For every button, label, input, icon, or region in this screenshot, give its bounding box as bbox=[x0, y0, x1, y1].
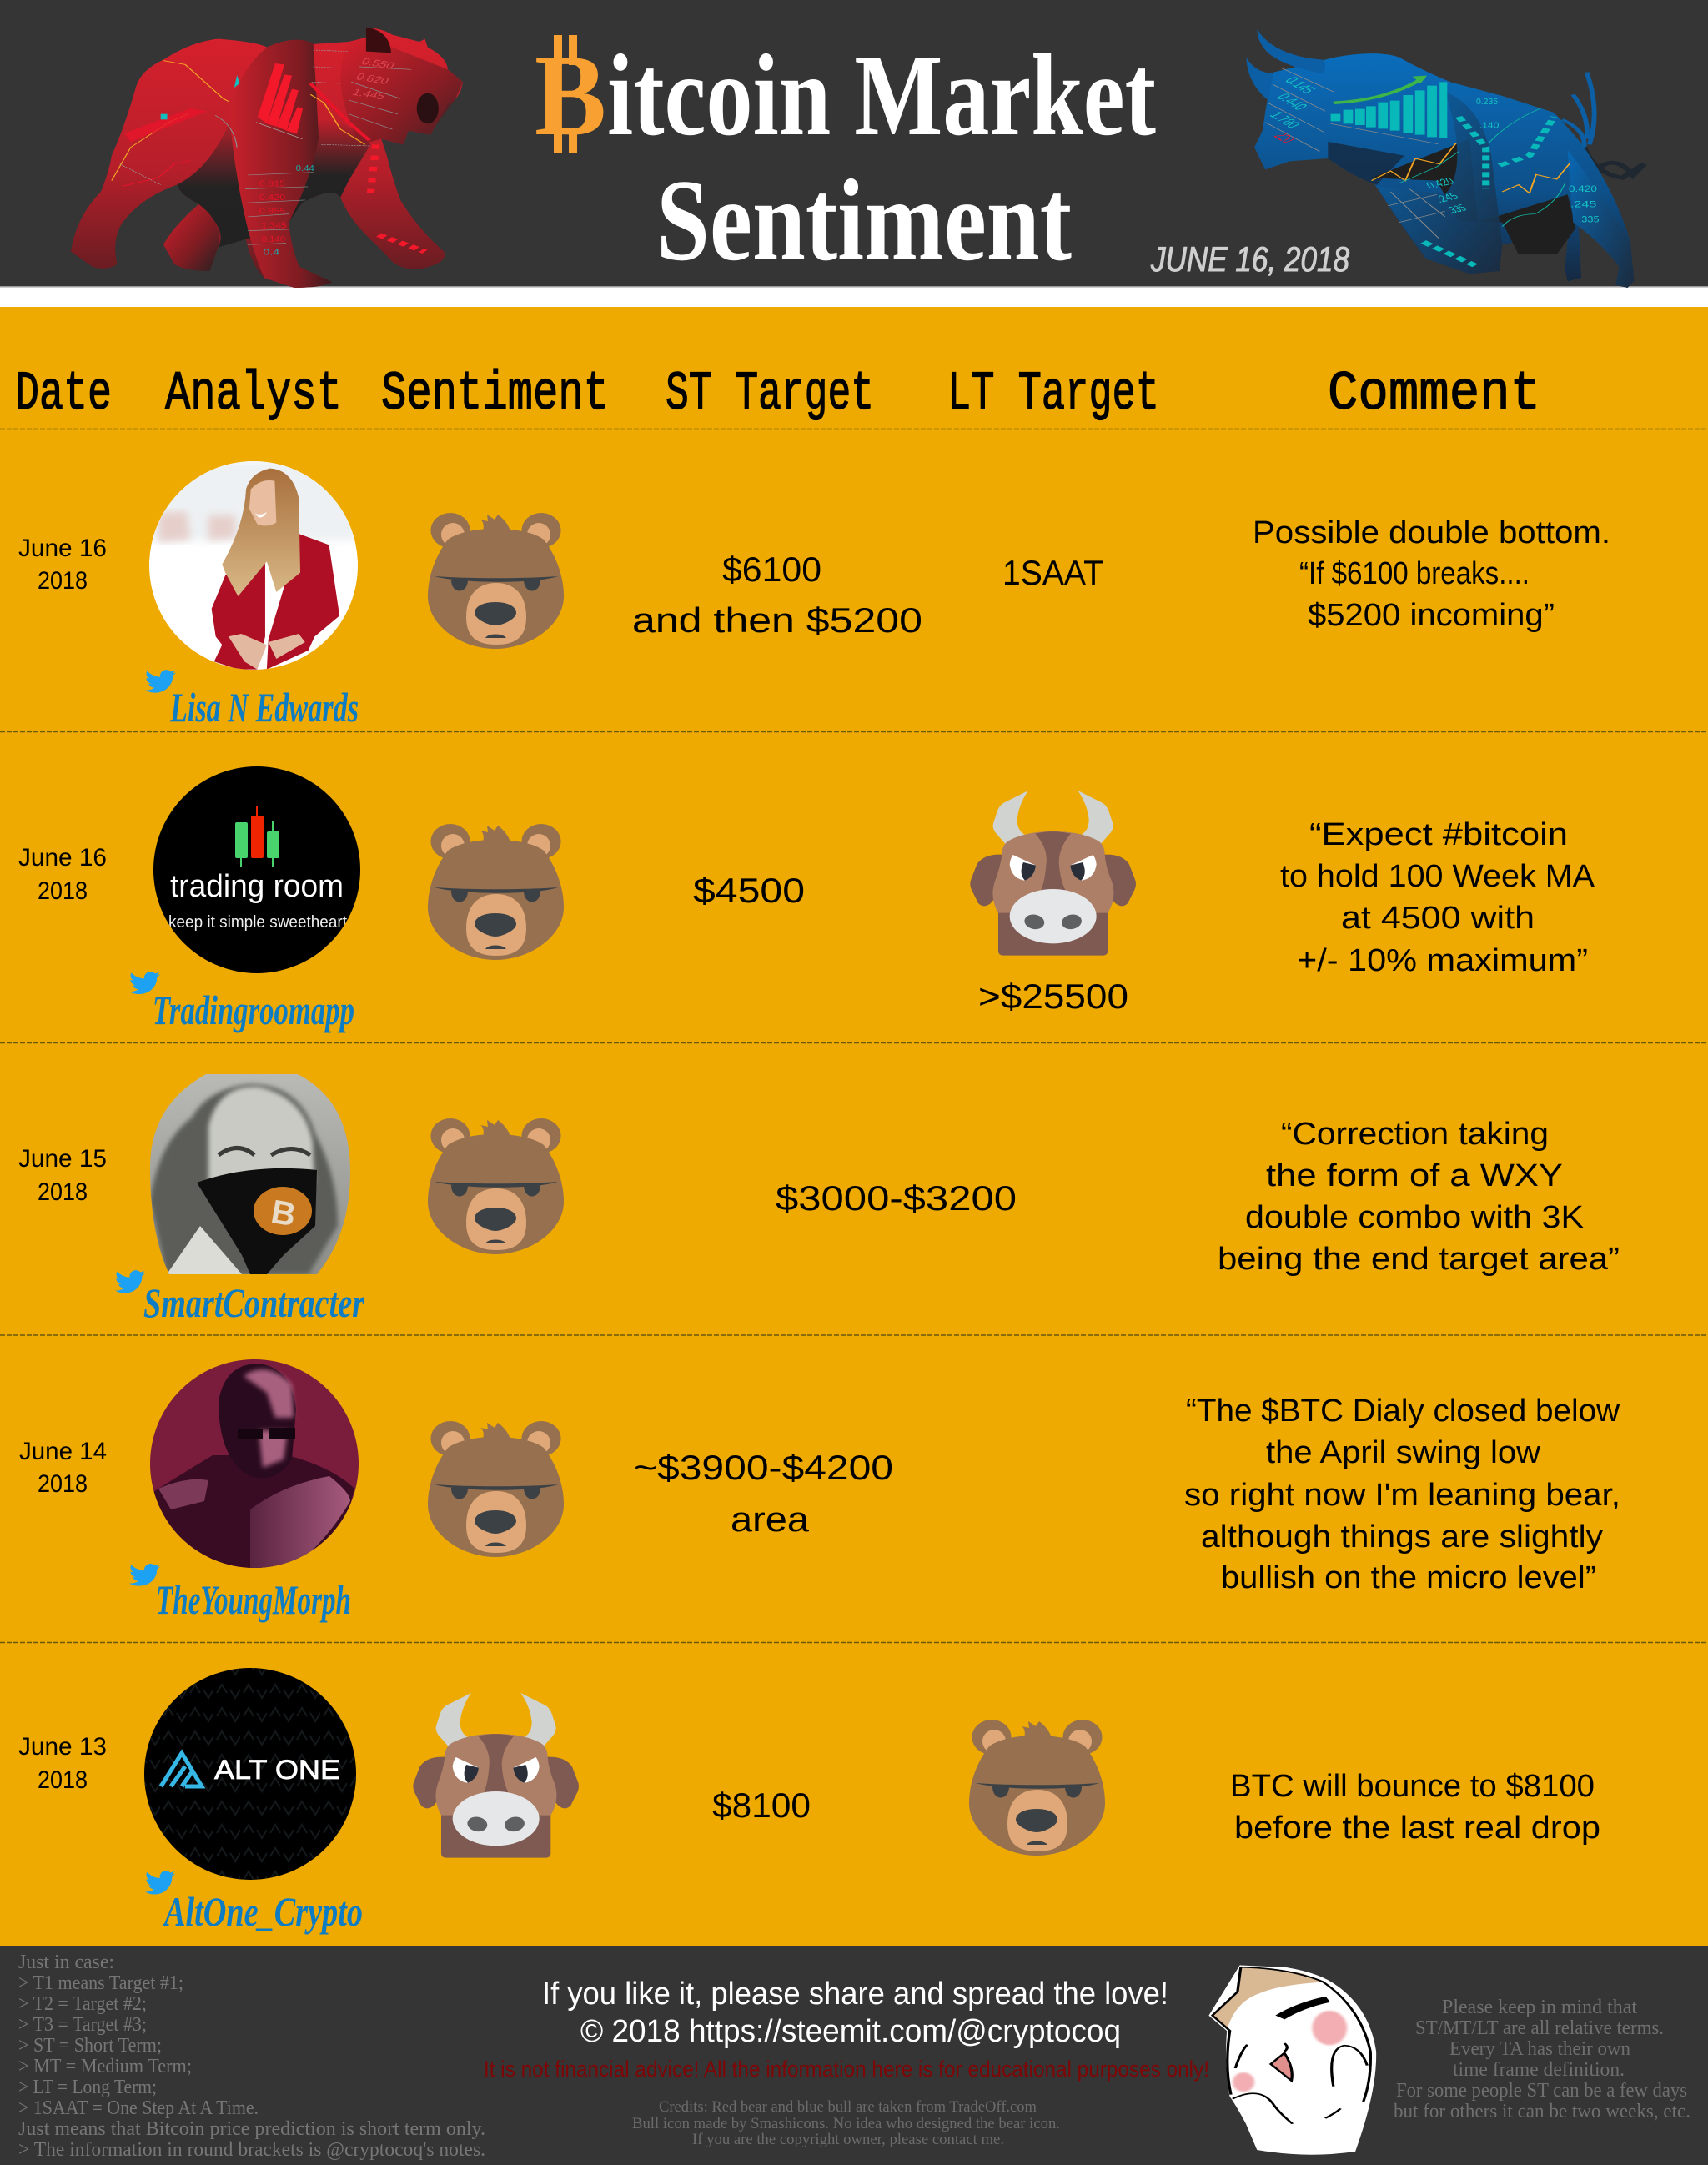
short term target: area bbox=[731, 1499, 810, 1539]
date: 2018 bbox=[38, 1178, 88, 1206]
footer band bbox=[0, 1946, 1708, 2165]
glossary notes: > 1SAAT = One Step At A Time. bbox=[18, 2097, 259, 2119]
date bbox=[18, 1145, 107, 1206]
blue bull illustration: 0.440 bbox=[1273, 92, 1312, 112]
icon: bear long term bbox=[969, 1720, 1105, 1856]
target: $3000-$3200 bbox=[776, 1178, 1017, 1218]
blue bull illustration: 0.420 bbox=[1569, 183, 1597, 194]
icon: bear sentiment bbox=[428, 824, 564, 960]
icon: bull sentiment bbox=[413, 1693, 579, 1858]
right-hand note: ST/MT/LT are all relative terms. bbox=[1415, 2017, 1664, 2039]
comment: at 4500 with bbox=[1341, 901, 1535, 936]
date: June 16 bbox=[18, 535, 107, 562]
icon: bitcoin B: B bbox=[535, 31, 606, 160]
date: 2018 bbox=[38, 877, 88, 905]
short term target: and then $5200 bbox=[632, 600, 922, 640]
icon: bear sentiment bbox=[428, 513, 564, 649]
red bear illustration: 1.445 bbox=[350, 87, 388, 102]
icon: twitter bird bbox=[129, 972, 160, 994]
glossary notes: Just in case: bbox=[18, 1952, 114, 1973]
short term target: ~$3900-$4200 bbox=[634, 1448, 893, 1487]
right-hand note bbox=[1394, 1997, 1690, 2122]
red bear illustration: 0.855 bbox=[259, 207, 285, 216]
row 1: Lisa N Edwards bbox=[18, 461, 1610, 731]
row 4: TheYoungMorph bbox=[19, 1359, 1620, 1623]
comment bbox=[1253, 515, 1610, 633]
date stamp: JUNE 16, 2018 bbox=[1150, 239, 1350, 279]
share message: If you like it, please share and spread the love! bbox=[542, 1977, 1168, 2012]
comment: BTC will bounce to $8100 bbox=[1230, 1769, 1595, 1804]
icon: twitter bird bbox=[145, 1871, 175, 1895]
red bear illustration: 0.140 bbox=[262, 235, 286, 244]
red bear illustration: 0.44 bbox=[296, 164, 314, 173]
handle: SmartContracter bbox=[143, 1279, 364, 1326]
icon: bear sentiment bbox=[428, 1421, 564, 1557]
comment bbox=[1184, 1394, 1620, 1595]
comment: to hold 100 Week MA bbox=[1280, 859, 1595, 894]
disclaimer: It is not financial advice! All the information here is for educational purposes only! bbox=[484, 2057, 1209, 2082]
blue bull illustration: .140 bbox=[1479, 121, 1500, 130]
blue bull illustration: .245 bbox=[1433, 190, 1461, 205]
icon: twitter bird bbox=[145, 670, 176, 693]
red bear illustration: 0.4 bbox=[263, 248, 279, 257]
credits: Bull icon made by Smashicons. No idea who designed the bear icon. bbox=[632, 2115, 1060, 2132]
row 5: AltOne_Crypto bbox=[18, 1668, 1600, 1935]
column headings: Comment bbox=[1328, 363, 1540, 425]
glossary notes: Just means that Bitcoin price prediction is short term only. bbox=[18, 2118, 485, 2140]
short term target: $4500 bbox=[693, 871, 805, 910]
short term target bbox=[634, 1448, 893, 1539]
amber table panel bbox=[0, 307, 1708, 1946]
date: 2018 bbox=[38, 1766, 88, 1794]
comment: the form of a WXY bbox=[1266, 1158, 1563, 1193]
comment: bullish on the micro level” bbox=[1221, 1560, 1596, 1595]
glossary notes: > The information in round brackets is @cryptocoq's notes. bbox=[18, 2139, 485, 2161]
column headings: Sentiment bbox=[381, 363, 609, 425]
glossary notes: > MT = Medium Term; bbox=[18, 2056, 192, 2077]
column headings: Date bbox=[15, 363, 112, 425]
right-hand note: For some people ST can be a few days bbox=[1396, 2080, 1687, 2102]
date: June 16 bbox=[18, 844, 107, 872]
icon: twitter bird bbox=[115, 1270, 145, 1293]
date: June 13 bbox=[18, 1733, 107, 1761]
comment: $5200 incoming” bbox=[1308, 598, 1555, 633]
avatar: trading room: keep it simple sweetheart bbox=[168, 913, 347, 932]
date: 2018 bbox=[38, 1470, 88, 1498]
avatar: Alt One logo: ALT ONE bbox=[214, 1755, 340, 1785]
red bear illustration: 0.815 bbox=[259, 179, 285, 188]
title: itcoin Market bbox=[607, 31, 1156, 160]
comment: Possible double bottom. bbox=[1253, 515, 1610, 550]
date bbox=[18, 844, 107, 905]
glossary notes bbox=[18, 1952, 485, 2161]
red bear illustration: 1.345 bbox=[262, 221, 287, 230]
long term target: 1SAAT bbox=[1002, 553, 1103, 592]
avatar: masked Franklin: B bbox=[269, 1193, 299, 1233]
right-hand note: Every TA has their own bbox=[1449, 2038, 1630, 2060]
share message: © 2018 https://steemit.com/@cryptocoq bbox=[580, 2014, 1121, 2049]
long term target with bull bbox=[970, 791, 1136, 1016]
blue bull illustration bbox=[1246, 29, 1644, 288]
credits: Credits: Red bear and blue bull are taken from TradeOff.com bbox=[659, 2098, 1037, 2116]
blue bull illustration: .335 bbox=[1579, 213, 1600, 224]
credits bbox=[632, 2098, 1060, 2148]
column headings: LT Target bbox=[947, 363, 1159, 425]
comment: before the last real drop bbox=[1234, 1811, 1600, 1846]
blue bull illustration: 1.780 bbox=[1266, 109, 1304, 130]
avatar: Lisa bbox=[149, 461, 358, 670]
glossary notes: > T3 = Target #3; bbox=[18, 2014, 147, 2036]
red bear illustration: 0.820 bbox=[354, 71, 392, 87]
long term target with bull: >$25500 bbox=[978, 977, 1128, 1016]
glossary notes: > T2 = Target #2; bbox=[18, 1993, 147, 2015]
avatar: masked Franklin bbox=[150, 1074, 350, 1274]
comment: “Correction taking bbox=[1281, 1117, 1549, 1152]
glossary notes: > T1 means Target #1; bbox=[18, 1972, 183, 1994]
handle: AltOne_Crypto bbox=[163, 1888, 363, 1935]
comment bbox=[1230, 1769, 1600, 1846]
comment: +/- 10% maximum” bbox=[1297, 943, 1588, 978]
short term target: $6100 bbox=[722, 550, 821, 589]
glossary notes: > ST = Short Term; bbox=[18, 2035, 162, 2057]
right-hand note: but for others it can be two weeks, etc. bbox=[1394, 2101, 1690, 2122]
icon: twitter bird bbox=[129, 1564, 160, 1586]
comment bbox=[1218, 1117, 1620, 1277]
blue bull illustration: 0.145 bbox=[1281, 75, 1319, 95]
title: Sentiment bbox=[656, 156, 1072, 285]
comment: double combo with 3K bbox=[1245, 1200, 1584, 1235]
handle: Lisa N Edwards bbox=[169, 684, 359, 731]
icon: bear sentiment bbox=[428, 1118, 564, 1254]
comment: the April swing low bbox=[1266, 1435, 1541, 1470]
short term target bbox=[632, 550, 922, 640]
blue bull illustration: .245 bbox=[1570, 198, 1596, 209]
comment: so right now I'm leaning bear, bbox=[1184, 1478, 1620, 1513]
date bbox=[18, 1733, 107, 1794]
blue bull illustration: 0.420 bbox=[1424, 175, 1457, 191]
short term target: $8100 bbox=[712, 1786, 811, 1825]
column headings bbox=[15, 363, 1540, 425]
row 2: Tradingroomapp bbox=[18, 766, 1595, 1033]
comment: although things are slightly bbox=[1201, 1520, 1603, 1555]
date bbox=[19, 1438, 107, 1498]
mascot character bbox=[1210, 1966, 1375, 2154]
right-hand note: Please keep in mind that bbox=[1442, 1997, 1637, 2018]
avatar: trading room bbox=[153, 766, 360, 973]
column headings: ST Target bbox=[666, 363, 874, 425]
comment: being the end target area” bbox=[1218, 1242, 1620, 1277]
handle: Tradingroomapp bbox=[153, 987, 354, 1033]
comment bbox=[1280, 817, 1595, 978]
date: 2018 bbox=[38, 567, 88, 595]
blue bull illustration: 0.235 bbox=[1476, 98, 1498, 107]
date bbox=[18, 535, 107, 595]
right-hand note: time frame definition. bbox=[1453, 2059, 1625, 2081]
header band bbox=[0, 0, 1708, 307]
column headings: Analyst bbox=[165, 363, 342, 425]
share message bbox=[542, 1977, 1168, 2049]
red bear illustration bbox=[71, 28, 463, 288]
blue bull illustration: .335 bbox=[1444, 203, 1469, 216]
avatar: trading room: trading room bbox=[170, 869, 344, 904]
title bbox=[535, 31, 1156, 285]
comment: “Expect #bitcoin bbox=[1309, 817, 1568, 852]
avatar: Alt One logo bbox=[143, 1668, 357, 1880]
handle: TheYoungMorph bbox=[156, 1576, 351, 1623]
red bear illustration: 0.420 bbox=[259, 193, 286, 203]
glossary notes: > LT = Long Term; bbox=[18, 2077, 157, 2098]
comment: “If $6100 breaks.... bbox=[1299, 556, 1530, 591]
credits: If you are the copyright owner, please contact me. bbox=[692, 2131, 1004, 2148]
row 3: SmartContracter bbox=[18, 1074, 1620, 1326]
avatar: Morpheus bbox=[150, 1359, 359, 1568]
blue bull illustration: 220 bbox=[1270, 130, 1299, 145]
date: June 14 bbox=[19, 1438, 107, 1465]
date: June 15 bbox=[18, 1145, 107, 1173]
comment: “The $BTC Dialy closed below bbox=[1186, 1394, 1620, 1429]
red bear illustration: 0.550 bbox=[359, 56, 397, 71]
